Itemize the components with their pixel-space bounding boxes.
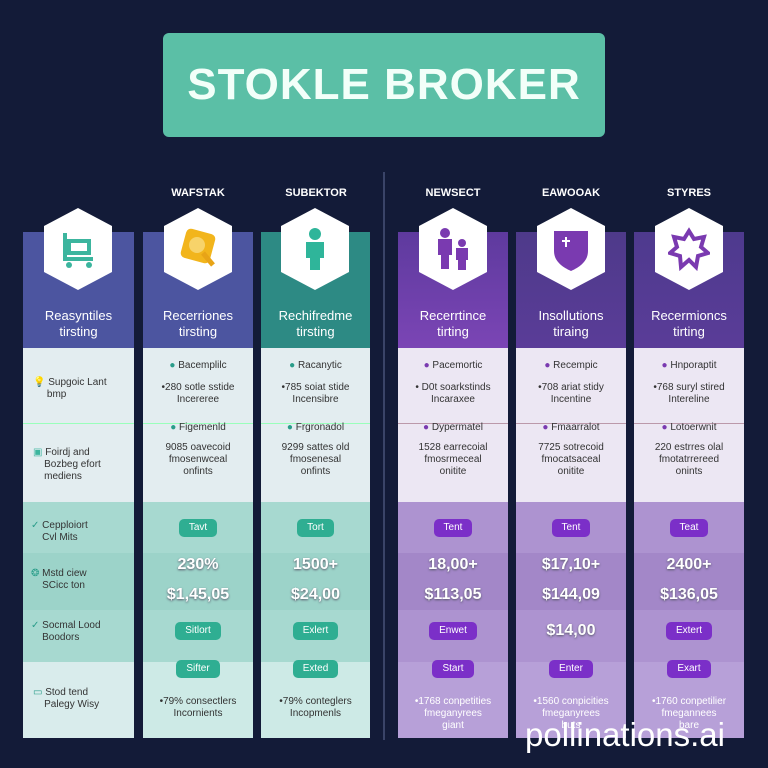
panel: column 6: Intereline: [668, 394, 710, 405]
panel: column 1: Reasyntiles: [45, 308, 112, 323]
panel: column 3: onfints: [301, 466, 330, 477]
panel: column 6: tirting: [673, 324, 705, 339]
panel: column 6: [634, 208, 744, 738]
panel: column 4: Incaraxee: [431, 394, 475, 405]
panel: column 4: • D0t soarkstinds: [415, 382, 491, 393]
title banner: [163, 33, 605, 137]
panel: column 5: fmocatsaceal: [542, 454, 600, 465]
panel: column 6: 2400+: [667, 556, 711, 573]
panel: column 6: onints: [676, 466, 702, 477]
panel: column 1: Bozbeg efort: [44, 459, 101, 470]
panel: column 3: ● Racanytic: [289, 360, 342, 371]
panel: column 6: 220 estrres olal: [655, 442, 723, 453]
panel: column 1: ▭ Stod tend: [33, 687, 88, 698]
panel: column 5: fmeganyrees: [542, 708, 600, 719]
panel: column 6: fmotatrrereed: [659, 454, 719, 465]
panel: column 5: Incentine: [551, 394, 591, 405]
panel: column 1: mediens: [44, 471, 82, 482]
panel: column 3: •785 soiat stide: [282, 382, 350, 393]
panel: column 2: 230%: [178, 556, 218, 573]
panel: column 6: Teat: [680, 522, 698, 533]
panel: column 5: $14,00: [547, 622, 595, 639]
icon: shield: [537, 208, 605, 290]
column labels: WAFSTAK: [171, 187, 225, 199]
panel: column 1: tirsting: [59, 324, 98, 339]
panel: column 5: •1560 conpicities: [533, 696, 609, 707]
panel: column 2: [143, 208, 253, 738]
panel: column 5: Insollutions: [538, 308, 604, 323]
panel: column 5: $144,09: [542, 586, 600, 603]
panel: column 4: Start: [442, 663, 464, 674]
panel: column 1: ▣ Foirdj and: [33, 447, 90, 458]
panel: column 5: [516, 208, 626, 738]
panel: column 2: •79% consectlers: [160, 696, 236, 707]
panel: column 1: SCicc ton: [42, 580, 85, 591]
divider: [383, 172, 385, 740]
panel: column 1: bmp: [47, 389, 66, 400]
panel: column 5: Enter: [559, 663, 583, 674]
panel: column 6: Recermioncs: [651, 308, 727, 323]
panel: column 3: Incopmenls: [290, 708, 341, 719]
panel: column 4: $113,05: [425, 586, 481, 603]
panel: column 4: onitite: [440, 466, 466, 477]
panel: column 2: ● Figemenld: [170, 422, 226, 433]
panel: column 2: Tavt: [189, 522, 207, 533]
column labels: [171, 187, 711, 199]
panel: column 1: ✓ Socmal Lood: [31, 620, 101, 631]
icon: person: [281, 208, 349, 290]
panel: column 4: fmosrmeceal: [424, 454, 482, 465]
panel: column 1: ✓ Cepploiort: [31, 520, 88, 531]
panel: column 2: •280 sotle sstide: [162, 382, 234, 393]
panel: column 5: tiraing: [553, 324, 589, 339]
panel: column 3: Exted: [303, 663, 328, 674]
panel: column 5: $17,10+: [542, 556, 600, 573]
panel: column 4: 1528 earrecoial: [419, 442, 487, 453]
icon: search coin: [164, 208, 232, 290]
panel: column 2: tirsting: [179, 324, 217, 339]
panel: column 5: onitite: [558, 466, 584, 477]
panel: column 4: 18,00+: [428, 556, 478, 573]
panel: column 4: Enwet: [439, 625, 467, 636]
panel: column 5: buts: [562, 720, 580, 731]
panel: column 6: ● Hnporaptit: [662, 360, 716, 371]
panel: column 6: •1760 conpetilier: [652, 696, 726, 707]
panel: column 3: tirsting: [296, 324, 335, 339]
panel: column 4: fmeganyrees: [424, 708, 482, 719]
panel: column 2: fmosenwceal: [169, 454, 227, 465]
panel: column 6: bare: [679, 720, 699, 731]
panel: column 3: $24,00: [291, 586, 340, 603]
panel: column 4: Recerrtince: [420, 308, 486, 323]
panel: column 4: [398, 208, 508, 738]
panel: column 3: ● Frgronadol: [287, 422, 344, 433]
panel: column 4: ● Dypermatel: [423, 422, 483, 433]
icon: cart: [44, 208, 112, 290]
panel: column 5: ● Recempic: [544, 360, 598, 371]
panel: column 2: Sifter: [186, 663, 210, 674]
panel: column 3: Tort: [307, 522, 324, 533]
panel: column 3: Exlert: [303, 625, 328, 636]
panel: column 6: •768 suryl stired: [653, 382, 725, 393]
panel: column 6: Extert: [676, 625, 702, 636]
panel: column 4: tirting: [437, 324, 469, 339]
panel: column 4: •1768 conpetities: [415, 696, 491, 707]
column labels: EAWOOAK: [542, 187, 600, 199]
panel: column 4: Tent: [444, 522, 462, 533]
panel: column 2: 9085 oavecoid: [165, 442, 231, 453]
panel: column 4: giant: [442, 720, 464, 731]
panel: column 5: 7725 sotrecoid: [538, 442, 604, 453]
panel: column 2: ● Bacemplilc: [169, 360, 227, 371]
panel: column 3: Incensibre: [292, 394, 339, 405]
panel: column 6: ● Lotoerwnit: [662, 422, 716, 433]
panel: column 1: ❂ Mstd ciew: [31, 568, 87, 579]
column labels: NEWSECT: [426, 187, 480, 199]
panel: column 2: Incornients: [174, 708, 222, 719]
panel: column 1: Cvl Mits: [42, 532, 78, 543]
panel: column 4: ● Pacemortic: [424, 360, 482, 371]
panel: column 5: Tent: [562, 522, 580, 533]
panel: column 3: fmosenesal: [290, 454, 341, 465]
title banner: STOKLE BROKER: [187, 60, 581, 109]
panel: column 3: 9299 sattes old: [282, 442, 349, 453]
panel: column 5: •708 ariat stidy: [538, 382, 604, 393]
icon: people: [419, 208, 487, 290]
panel: column 6: Exart: [677, 663, 701, 674]
panel: column 1: Boodors: [42, 632, 79, 643]
icon: gear burst: [655, 208, 723, 290]
column labels: STYRES: [667, 187, 711, 199]
watermark: pollinations.ai: [525, 716, 725, 753]
panel: column 2: Sitlort: [185, 625, 211, 636]
panel: column 2: Recerriones: [163, 308, 233, 323]
panel: column 6: fmegannees: [661, 708, 717, 719]
panel: column 3: 1500+: [293, 556, 338, 573]
panel: column 5: ● Fmaarralot: [542, 422, 600, 433]
column labels: SUBEKTOR: [285, 187, 347, 199]
panel: column 2: $1,45,05: [167, 586, 229, 603]
panel: column 3: •79% conteglers: [279, 696, 352, 707]
panel: column 3: [261, 208, 370, 738]
panel: column 1: [23, 208, 134, 738]
panel: column 6: $136,05: [660, 586, 718, 603]
panel: column 2: onfints: [183, 466, 213, 477]
panel: column 3: Rechifredme: [279, 308, 352, 323]
panel: column 1: 💡 Supgoic Lant: [33, 377, 107, 388]
panel: column 1: Palegy Wisy: [44, 699, 99, 710]
panel: column 2: Incereree: [177, 394, 219, 405]
